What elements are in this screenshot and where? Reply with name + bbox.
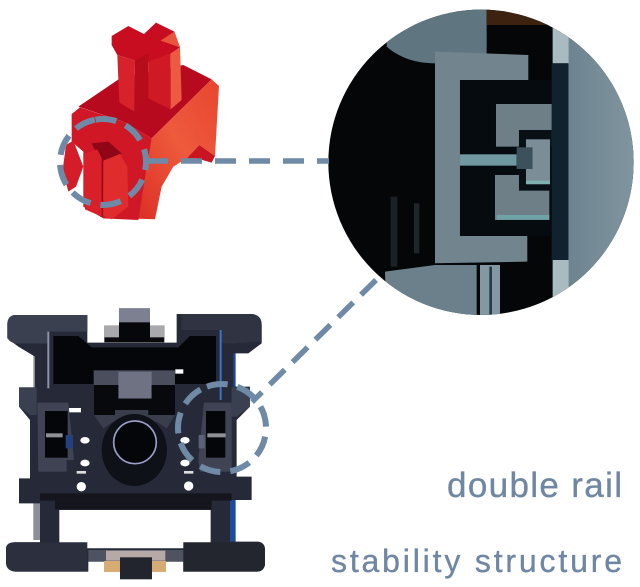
lower right foot xyxy=(183,542,265,572)
icon: magnified double rail lens xyxy=(320,0,640,320)
icon: red switch stem xyxy=(63,23,219,220)
small holes left xyxy=(80,437,90,444)
right side lug xyxy=(232,387,250,417)
white window xyxy=(59,510,211,548)
lower left foot xyxy=(6,542,87,572)
right light strip xyxy=(553,27,569,63)
right grey panel xyxy=(568,37,634,288)
inner dark cavity xyxy=(460,80,552,236)
horizontal rail xyxy=(460,154,517,166)
brown corner xyxy=(486,10,548,25)
round socket ring xyxy=(114,421,156,464)
callout: diagonal dashed connector xyxy=(252,280,376,402)
cross stem front faces xyxy=(117,55,135,112)
heading: double rail: double rail xyxy=(447,466,622,505)
callout: horizontal dashed connector xyxy=(147,158,329,164)
callout: dashed circle on housing xyxy=(166,372,278,484)
lower left dim panels xyxy=(391,197,397,267)
housing left grey edge xyxy=(33,343,48,540)
teal accent lower xyxy=(497,215,549,220)
inner tab xyxy=(526,139,550,184)
left side lug xyxy=(19,387,37,415)
stem body top face xyxy=(78,65,212,138)
center collar xyxy=(94,410,175,428)
lower dark bar xyxy=(40,493,232,501)
round socket shadow xyxy=(102,414,167,486)
callout: dashed circle on stem xyxy=(53,112,153,212)
stem body front face xyxy=(72,107,152,220)
rail end cap xyxy=(517,147,533,169)
inner cavity around tab xyxy=(519,130,552,191)
top right shoulder xyxy=(182,314,262,343)
cavity light edge xyxy=(45,332,51,388)
small holes right xyxy=(180,437,190,444)
central dark recess xyxy=(94,385,175,415)
center prong right bar xyxy=(103,154,128,219)
right dark rail xyxy=(552,63,568,260)
right rail block xyxy=(198,403,232,472)
left front prong xyxy=(63,141,83,192)
upper grey surface xyxy=(387,7,487,63)
bottom center tab xyxy=(88,550,183,562)
lower grey surface xyxy=(385,265,477,317)
lens background xyxy=(320,0,640,320)
center prong gap xyxy=(92,142,122,217)
inner lower block xyxy=(495,175,549,220)
top left shoulder highlight xyxy=(7,315,87,343)
cross stem arm highlight xyxy=(161,32,180,47)
housing main silhouette xyxy=(6,314,265,572)
inner upper block xyxy=(496,104,552,147)
blue edge xyxy=(222,330,236,543)
left rail block xyxy=(37,403,74,472)
lower stripes xyxy=(480,265,500,318)
center prong left bar xyxy=(83,149,102,217)
outer E bracket xyxy=(435,52,528,263)
stem body right face xyxy=(128,79,219,219)
cross stem top xyxy=(112,23,180,62)
central block xyxy=(94,371,175,386)
stem notch shadow xyxy=(187,145,215,163)
top nub xyxy=(104,326,164,342)
icon: black switch housing xyxy=(6,308,265,579)
heading: stability structure: stability structure xyxy=(331,543,622,579)
small white windows xyxy=(175,369,183,374)
upper dark cavity xyxy=(53,336,216,384)
